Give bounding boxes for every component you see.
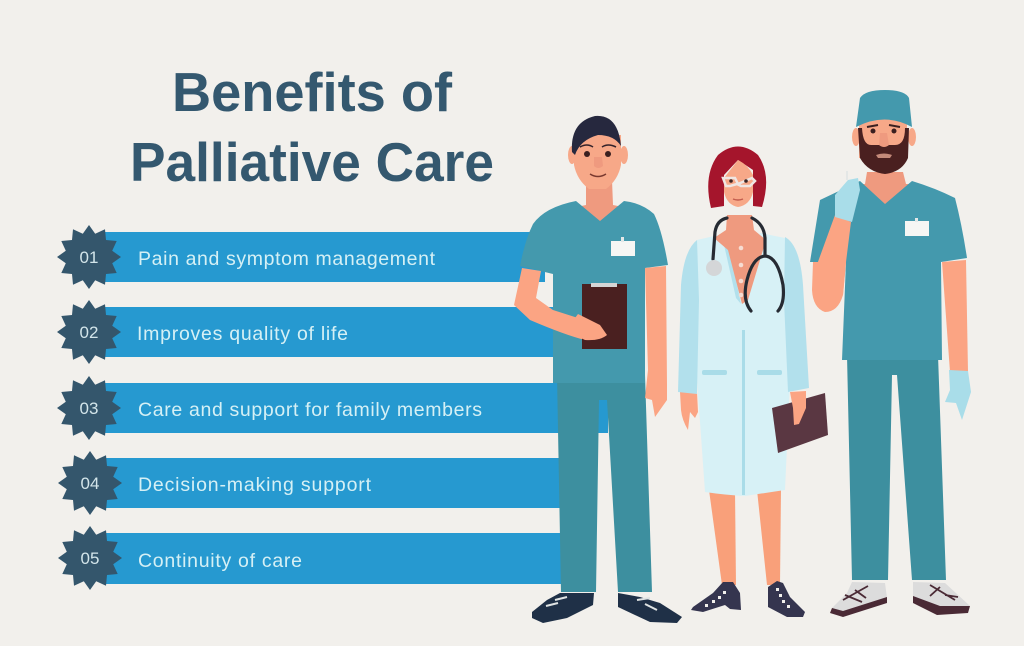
benefit 5	[58, 526, 563, 590]
figure: male nurse with clipboard	[514, 116, 682, 623]
benefit 4: 04	[81, 474, 99, 493]
benefit 2	[57, 300, 560, 364]
figure: bearded surgeon with syringe	[810, 90, 971, 617]
benefit 2: Improves quality of life	[137, 323, 348, 345]
benefit 4	[58, 451, 563, 515]
benefit 2: 02	[80, 323, 98, 342]
benefit 5: Continuity of care	[138, 550, 302, 572]
title: Benefits of	[172, 61, 453, 123]
benefit 3: 03	[80, 399, 98, 418]
benefit 1: 01	[80, 248, 98, 267]
benefit 3	[57, 376, 608, 440]
benefit 1: Pain and symptom management	[138, 248, 436, 270]
benefit 5: 05	[81, 549, 99, 568]
title: Palliative Care	[130, 131, 494, 193]
benefit 4: Decision-making support	[138, 474, 372, 496]
figure: female doctor with stethoscope	[678, 146, 828, 617]
title	[130, 61, 494, 193]
benefit 1	[57, 225, 545, 289]
benefit 3: Care and support for family members	[138, 399, 482, 421]
